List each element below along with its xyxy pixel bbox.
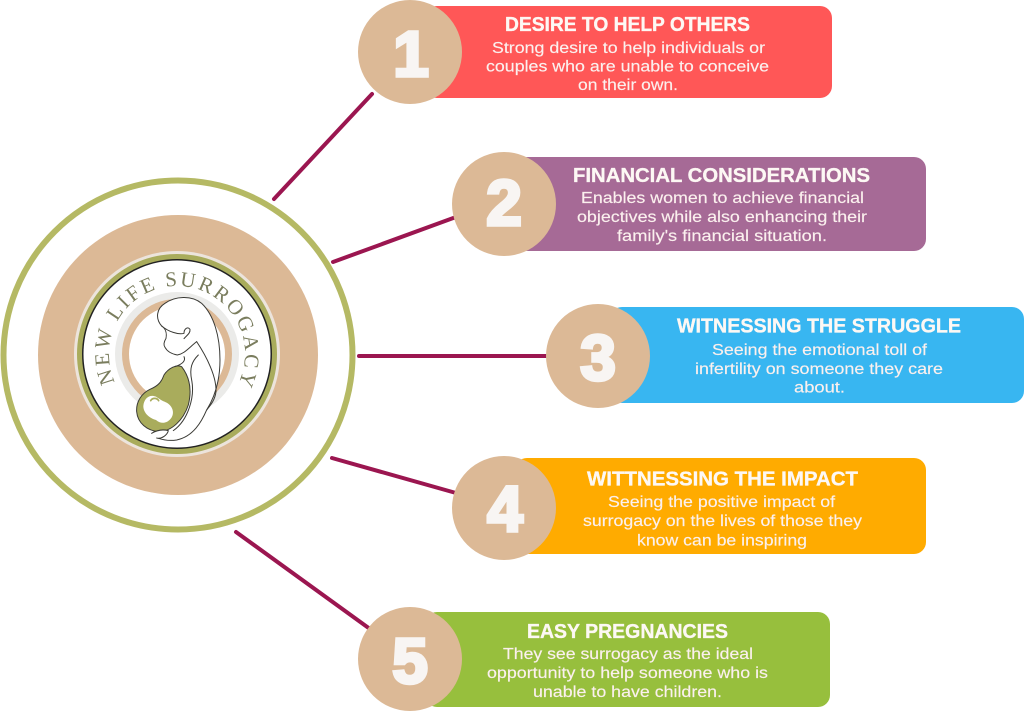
number circle 2	[452, 152, 556, 256]
body 2	[577, 190, 868, 245]
heading 1: DESIRE TO HELP OTHERS	[505, 13, 750, 36]
heading 4: WITTNESSING THE IMPACT	[587, 468, 858, 490]
card 5: easy pregnancies	[358, 607, 830, 711]
body 5	[487, 646, 768, 701]
central logo badge	[0, 178, 356, 532]
body 5: opportunity to help someone who is	[487, 665, 768, 682]
number circle 3: 3	[580, 322, 616, 394]
body 5: unable to have children.	[533, 684, 722, 701]
number circle 4	[452, 456, 556, 560]
number circle 5	[358, 607, 462, 711]
body 3	[695, 342, 943, 396]
number circle 1: 1	[393, 18, 429, 90]
body 3: Seeing the emotional toll of	[712, 342, 928, 359]
body 3: infertility on someone they care	[695, 361, 943, 378]
body 3: about.	[794, 380, 845, 396]
body 4: Seeing the positive impact of	[608, 494, 836, 511]
heading 3: WITNESSING THE STRUGGLE	[677, 314, 961, 338]
body 1	[486, 40, 769, 94]
number circle 3	[546, 304, 650, 408]
number circle 5: 5	[392, 625, 428, 697]
body 4: surrogacy on the lives of those they	[583, 513, 862, 530]
body 2: Enables women to achieve financial	[581, 190, 864, 207]
card 2: financial considerations	[452, 152, 926, 256]
card 4: wittnessing the impact	[452, 456, 926, 560]
body 5: They see surrogacy as the ideal	[503, 646, 753, 663]
body 1: Strong desire to help individuals or	[492, 40, 766, 57]
body 2: family's financial situation.	[617, 228, 827, 245]
card 1: desire to help others	[358, 0, 832, 104]
body 1: couples who are unable to conceive	[486, 58, 769, 76]
number circle 1	[358, 0, 462, 104]
body 1: on their own.	[578, 77, 678, 94]
heading 5: EASY PREGNANCIES	[527, 620, 728, 643]
body 4	[583, 494, 862, 550]
connector lines	[236, 94, 550, 629]
heading 2: FINANCIAL CONSIDERATIONS	[573, 164, 870, 187]
logo text: NEW LIFE SURROGACY	[95, 272, 258, 388]
icon: pregnant woman	[137, 297, 220, 440]
body 2: objectives while also enhancing their	[577, 209, 868, 226]
body 4: know can be inspiring	[637, 532, 807, 550]
number circle 4: 4	[487, 473, 523, 545]
number circle 2: 2	[486, 167, 522, 239]
card 3: witnessing the struggle	[546, 304, 1024, 408]
